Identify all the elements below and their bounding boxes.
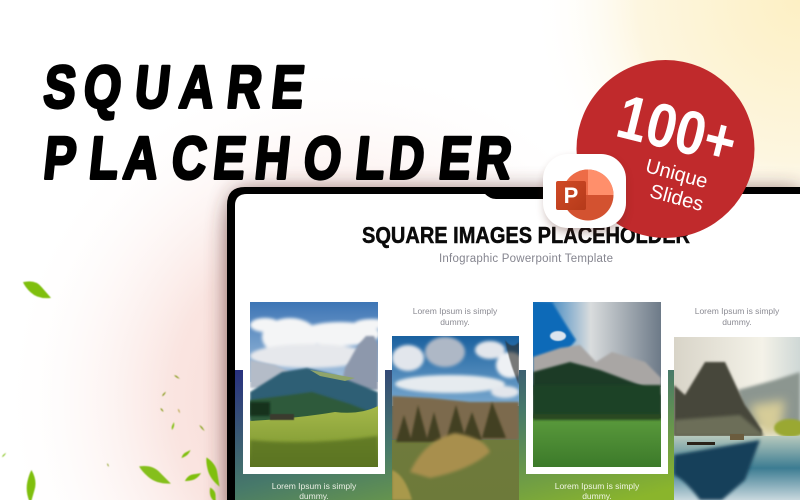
laptop shadow (227, 190, 800, 500)
card 1 (243, 295, 390, 474)
slide (235, 194, 800, 500)
title: PLACEHOLDER (41, 125, 515, 192)
badge: 100+ unique slides (576, 60, 754, 238)
title: SQUARE (41, 54, 308, 121)
badge number: 100+ (610, 82, 744, 178)
slide title: SQUARE IMAGES PLACEHOLDER (362, 222, 690, 248)
leaves (2, 278, 225, 500)
laptop frame (227, 187, 800, 500)
badge caption: Unique (643, 155, 710, 193)
photo: forest and peaks (533, 302, 661, 467)
badge caption (643, 155, 710, 216)
caption 2: Lorem Ipsum is simply (413, 306, 498, 316)
photo: lake and karst (674, 337, 800, 500)
card 3 (526, 295, 668, 474)
caption 1: Lorem Ipsum is simply (272, 481, 357, 491)
caption 4: Lorem Ipsum is simply (695, 306, 780, 316)
title (41, 54, 515, 192)
caption 3: Lorem Ipsum is simply (555, 481, 640, 491)
photo: cloudy field (392, 336, 524, 500)
caption 4: dummy. (722, 317, 752, 327)
badge caption: Slides (647, 181, 706, 216)
caption 2: dummy. (440, 317, 470, 327)
photo: alpine meadow (250, 302, 390, 467)
icon: PowerPoint (543, 154, 626, 232)
icon: PowerPoint: P (564, 183, 578, 208)
slide subtitle: Infographic Powerpoint Template (439, 253, 613, 265)
gradient band (235, 370, 800, 500)
